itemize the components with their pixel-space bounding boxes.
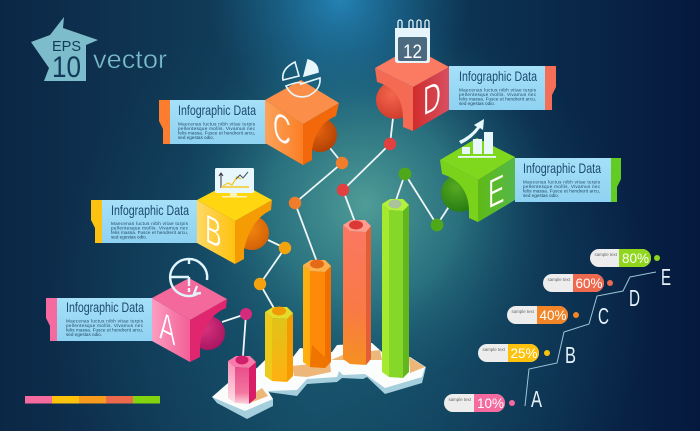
pill: 25% [478,344,550,362]
panel E: Maecenas luctus nibh vitae turpis [523,180,601,184]
panel A: felis massa. Fusce et hendrerit arcu, [66,328,143,332]
step line with letters A to E: C [598,303,609,329]
panel D [449,66,556,110]
bar: green [382,199,409,378]
bar: orange [303,260,331,368]
panel C: Maecenas luctus nibh vitae turpis [178,122,256,126]
panel C: Infographic Data [178,102,256,118]
pill: 80%: sample text [594,252,618,257]
bar: yellow [265,306,293,382]
pill: 40%: 40% [540,307,566,323]
panel B: pellentesque mollis. Vivamus nec [111,226,189,230]
panel A [46,298,153,341]
panel B: Infographic Data [111,202,189,218]
panel D: felis massa. Fusce et hendrerit arcu, [459,96,536,102]
panel C: sed egestas odio. [178,135,214,140]
icon: bar chart with arrow [458,119,496,158]
cube A [152,278,227,362]
pill: 10% [444,394,515,412]
step line with letters A to E: E [661,264,671,290]
cube C [265,80,339,165]
panel D: sed egestas odio. [459,101,495,106]
panel A: sed egestas odio. [66,332,102,337]
pill: 60%: sample text [548,277,571,282]
panel C: pellentesque mollis. Vivamus nec [178,126,256,131]
panel A: pellentesque mollis. Vivamus nec [66,323,144,328]
panel D: Maecenas luctus nibh vitae turpis [459,88,537,92]
pill: 10%: 10% [477,395,504,411]
bar: pink [228,356,256,404]
pill: 10%: sample text [448,397,472,402]
icon: monitor chart [215,168,254,198]
cube E: E [488,166,505,218]
cube B [197,180,272,264]
panel B: felis massa. Fusce et hendrerit arcu, [111,230,188,235]
panel A: Maecenas luctus nibh vitae turpis [66,318,144,324]
step line with letters A to E: B [565,342,576,368]
panel B [91,200,198,243]
panel E: Infographic Data [523,160,601,176]
pill: 25%: sample text [482,347,506,352]
pill: 80%: 80% [622,250,649,266]
step line with letters A to E: D [629,285,640,311]
step line with letters A to E: A [531,386,542,412]
bar: coral [343,220,371,365]
cube A: A [159,303,176,355]
panel A: Infographic Data [66,299,144,315]
colour legend bar [25,396,160,404]
panel E: pellentesque mollis. Vivamus nec [523,184,601,189]
icon: pie chart [283,60,320,97]
icon: calendar: 12 [403,42,422,63]
panel C: felis massa. Fusce et hendrerit arcu, [178,130,255,136]
panel E [515,158,621,202]
cube B: B [205,206,222,258]
panel C [159,100,266,144]
icon: clock [170,259,207,296]
panel B: Maecenas luctus nibh vitae turpis [111,221,189,226]
pill: 40%: sample text [512,309,535,314]
pill: 40% [507,306,579,324]
pill: 60%: 60% [576,275,602,291]
step line with letters A to E [525,264,671,412]
pill: 60% [543,274,613,292]
icon: calendar [395,20,430,63]
pill: 25%: 25% [510,345,538,361]
logo: EPS 10 vector: EPS [52,38,81,55]
cube D [375,47,449,131]
pill: 80% [590,249,660,267]
connector lines [222,118,450,356]
logo: EPS 10 vector [31,17,167,84]
logo: EPS 10 vector: 10 [52,51,81,84]
platform base [212,343,426,419]
cube E [440,138,515,222]
panel D: Infographic Data [459,68,537,84]
panel B: sed egestas odio. [111,234,147,240]
nodes [240,138,443,320]
panel E: sed egestas odio. [523,193,559,198]
panel D: pellentesque mollis. Vivamus nec [459,92,537,97]
cube D: D [423,72,441,125]
logo: EPS 10 vector: vector [93,44,167,74]
cube C: C [273,103,291,156]
panel E: felis massa. Fusce et hendrerit arcu, [523,188,600,194]
